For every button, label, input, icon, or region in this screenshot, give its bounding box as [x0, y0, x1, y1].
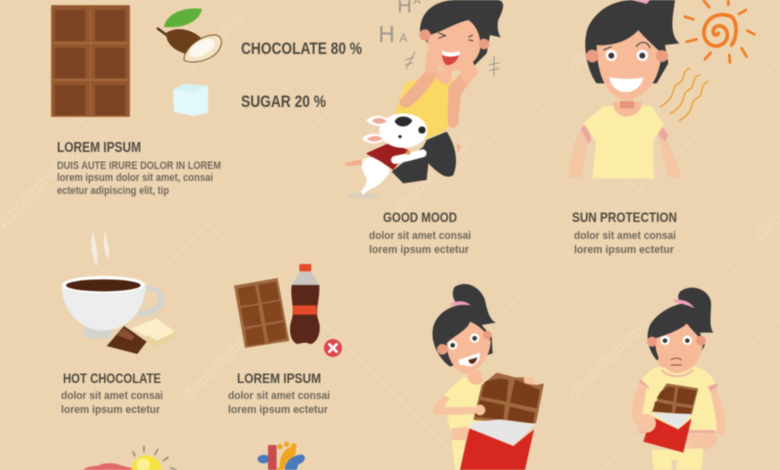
text block: lorem ipsum intro: ectetur adipiscing elit, tip	[57, 185, 169, 197]
label: lorem ipsum: dolor sit amet consai	[228, 390, 330, 402]
illustration: laughing girl with rabbit	[343, 0, 503, 199]
label: hot chocolate: lorem ipsum ectetur	[61, 404, 161, 416]
watermark text: ositphotos	[179, 7, 248, 75]
body	[568, 130, 682, 177]
label: good mood	[369, 209, 471, 256]
rabbit	[343, 159, 363, 166]
label: hot chocolate: dolor sit amet consai	[61, 390, 163, 402]
text block: lorem ipsum intro	[57, 140, 221, 197]
hair	[585, 0, 679, 83]
watermark text: depositphotos	[564, 315, 653, 403]
illustration: smiling girl with sun	[568, 0, 754, 178]
icon: heart	[257, 442, 305, 470]
ha ha marks: A	[399, 31, 407, 45]
watermark text: depositphotos	[179, 315, 268, 403]
icon: hot chocolate cup	[62, 225, 175, 354]
label: lorem ipsum: LOREM IPSUM	[237, 370, 321, 386]
sun	[685, 0, 754, 63]
text block: lorem ipsum intro: lorem ipsum dolor sit amet, consai	[57, 172, 213, 184]
label: hot chocolate: HOT CHOCOLATE	[63, 370, 161, 386]
ha ha marks: H	[378, 21, 395, 47]
label: good mood: GOOD MOOD	[383, 209, 457, 225]
label: sun protection: SUN PROTECTION	[572, 209, 677, 225]
watermark text: depositphotos	[389, 130, 478, 218]
icon: brain and light bulb	[83, 446, 177, 470]
icon: cocoa pod	[157, 8, 221, 62]
text block: lorem ipsum intro: DUIS AUTE IRURE DOLOR IN LOREM	[57, 160, 221, 172]
label: lorem ipsum: lorem ipsum ectetur	[228, 404, 329, 416]
label: good mood: lorem ipsum ectetur	[369, 244, 470, 256]
illustration: overweight girl eating chocolate	[632, 288, 725, 470]
illustration: girl eating chocolate	[432, 284, 544, 470]
label: sun protection	[572, 209, 677, 256]
heat waves	[661, 68, 708, 121]
icon: sugar cube	[173, 84, 208, 116]
label: sun protection: dolor sit amet consai	[574, 230, 676, 242]
label: sugar 20%: SUGAR 20 %	[241, 92, 326, 111]
label: chocolate 80%: CHOCOLATE 80 %	[241, 39, 362, 58]
ha ha marks	[378, 0, 421, 47]
label: sun protection: lorem ipsum ectetur	[574, 244, 675, 256]
label: hot chocolate	[61, 370, 163, 416]
text block: lorem ipsum intro: LOREM IPSUM	[57, 140, 141, 156]
icon: chocolate bar	[51, 5, 130, 117]
icon: chocolate and cola	[234, 264, 342, 357]
face	[597, 30, 662, 100]
label: good mood: dolor sit amet consai	[369, 230, 471, 242]
label: lorem ipsum	[228, 370, 330, 416]
